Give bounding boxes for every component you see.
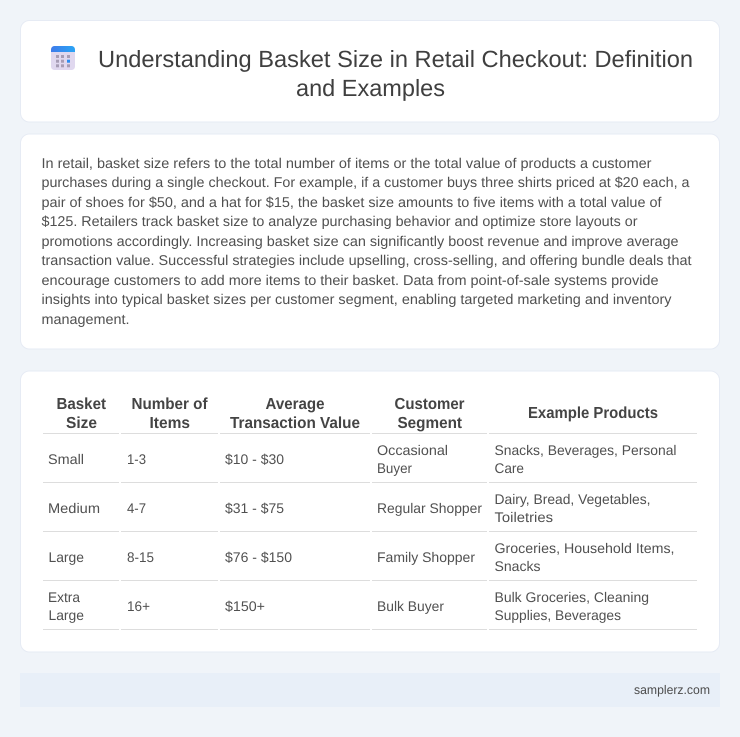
table header: Average xyxy=(266,396,325,413)
title: Understanding Basket Size in Retail Checkout: Definition xyxy=(98,46,693,72)
title xyxy=(98,46,693,101)
table header: Segment xyxy=(398,415,463,432)
table row: large xyxy=(48,540,674,574)
footer: samplerz.com xyxy=(634,683,710,697)
table row: small xyxy=(48,442,676,476)
text block: description: $125. Retailers track basket size to analyze purchasing behavior and optimize store layouts or xyxy=(42,214,638,230)
text block: description: insights into typical basket sizes per customer segment, enabling targeted marketing and inventory xyxy=(42,292,672,308)
text block: description: pair of shoes for $50, and a hat for $15, the basket size amounts to five items with a total value of xyxy=(42,195,662,211)
text block: description: In retail, basket size refers to the total number of items or the total value of products a customer xyxy=(42,156,652,172)
table row: large: Groceries, Household Items, xyxy=(494,540,674,556)
table row: small: Buyer xyxy=(377,460,412,476)
panel: table card xyxy=(20,371,720,652)
table row: extra large: 16+ xyxy=(127,598,150,614)
table row: large: Snacks xyxy=(494,558,540,574)
table header: Customer xyxy=(394,396,464,413)
table row: medium: Regular Shopper xyxy=(377,500,482,516)
table header: Transaction Value xyxy=(230,415,360,432)
table row: small: 1-3 xyxy=(127,451,146,467)
text block: description: encourage customers to add more items to their basket. Data from point-of-sale systems provide xyxy=(42,273,659,289)
table header: Number of xyxy=(132,396,208,413)
text block: description xyxy=(42,156,692,328)
icon: calendar grid xyxy=(51,46,75,70)
table row: small: Care xyxy=(494,460,524,476)
table header: Example Products xyxy=(528,405,658,422)
table row: small: $10 - $30 xyxy=(225,451,284,467)
table header: Basket xyxy=(56,396,107,413)
table row: extra large: Extra xyxy=(48,589,80,605)
table row: large: 8-15 xyxy=(127,549,154,565)
table header: Items xyxy=(150,415,190,432)
title: and Examples xyxy=(296,75,445,101)
table header: Size xyxy=(66,415,97,432)
panel: title card xyxy=(20,20,720,122)
panel: description card xyxy=(20,134,720,349)
table row: medium xyxy=(48,491,650,525)
table row: small: Small xyxy=(48,451,84,467)
table row: extra large xyxy=(48,589,649,623)
text block: description: promotions accordingly. Increasing basket size can significantly boost revenue and improve average xyxy=(42,234,679,250)
table row: medium: $31 - $75 xyxy=(225,500,284,516)
table row: extra large: $150+ xyxy=(225,598,265,614)
table row: extra large: Large xyxy=(48,607,84,623)
table row: extra large: Bulk Buyer xyxy=(377,598,444,614)
table row: large: Family Shopper xyxy=(377,549,475,565)
table row: medium: Dairy, Bread, Vegetables, xyxy=(494,491,650,507)
table row: medium: Medium xyxy=(48,500,100,516)
text block: description: purchases during a single checkout. For example, if a customer buys three shirts priced at $20 each, a xyxy=(42,175,690,191)
table row: small: Snacks, Beverages, Personal xyxy=(494,442,676,458)
text block: description: transaction value. Successful strategies include upselling, cross-selling, and offering bundle deals that xyxy=(42,253,692,269)
table row: medium: Toiletries xyxy=(494,509,553,525)
table row: small: Occasional xyxy=(377,442,448,458)
table header xyxy=(56,396,658,432)
table row: extra large: Supplies, Beverages xyxy=(494,607,621,623)
table row: medium: 4-7 xyxy=(127,500,146,516)
table row: large: Large xyxy=(48,549,84,565)
text block: description: management. xyxy=(42,312,130,328)
table row: large: $76 - $150 xyxy=(225,549,292,565)
footer xyxy=(20,673,720,707)
table row: extra large: Bulk Groceries, Cleaning xyxy=(494,589,649,605)
